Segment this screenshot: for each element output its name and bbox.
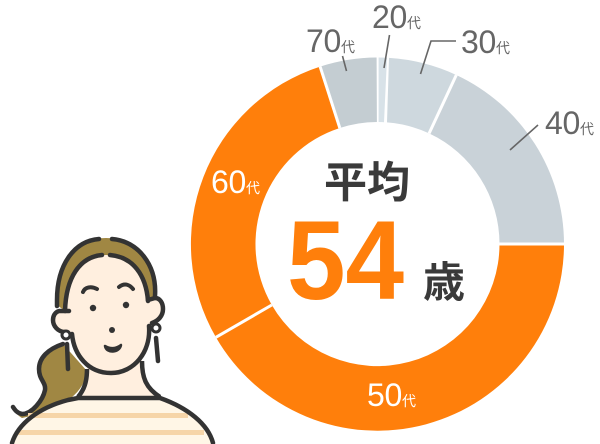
unit: years old: 歳 bbox=[423, 259, 465, 306]
hair bbox=[57, 238, 155, 311]
segment: 70s bbox=[320, 58, 377, 128]
earring: left bbox=[62, 331, 70, 369]
donut chart: age distribution bbox=[191, 58, 564, 431]
eyes bbox=[90, 302, 129, 311]
hair outer outline bbox=[57, 239, 155, 306]
label: 30s: 30代 bbox=[461, 24, 510, 60]
segment: 60s bbox=[191, 67, 340, 337]
label: 70s: 70代 bbox=[306, 23, 355, 59]
label: 20s: 20代 bbox=[372, 0, 421, 35]
segment dividers bbox=[216, 67, 564, 337]
sweater bbox=[12, 398, 214, 444]
segment: 50s bbox=[216, 244, 564, 431]
ponytail bbox=[13, 344, 87, 418]
segment: 40s bbox=[429, 75, 564, 244]
mouth bbox=[105, 345, 121, 352]
eyebrows bbox=[83, 285, 133, 292]
label: 40s: 40代 bbox=[545, 105, 594, 141]
hairline outline bbox=[65, 255, 148, 311]
illustration: woman bbox=[12, 238, 214, 444]
heading: average: 平均 bbox=[324, 160, 410, 208]
sweater stripes bbox=[18, 413, 204, 435]
neck bbox=[80, 358, 160, 399]
average value: 54: 54 bbox=[287, 199, 404, 324]
label: 50s: 50代 bbox=[367, 377, 416, 413]
ear and jaw outline bbox=[53, 298, 163, 373]
segment: 30s bbox=[387, 58, 456, 133]
neck outlines bbox=[78, 361, 160, 397]
leader lines bbox=[342, 35, 538, 150]
segment: 20s bbox=[379, 58, 387, 122]
sweater outline bbox=[12, 398, 213, 443]
ponytail outline bbox=[13, 344, 63, 414]
nose bbox=[109, 327, 115, 333]
label: 60s: 60代 bbox=[211, 164, 260, 200]
face bbox=[53, 255, 163, 373]
earring: right bbox=[152, 324, 160, 361]
